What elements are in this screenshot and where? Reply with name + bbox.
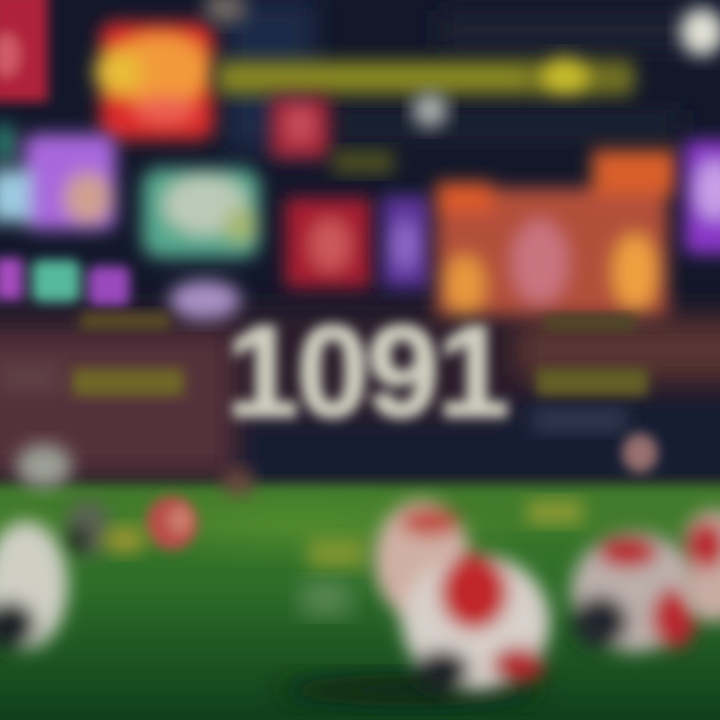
soccer ball: left small [66, 500, 110, 556]
screen: green and white [142, 168, 260, 258]
text: small yellow [332, 150, 394, 174]
soccer ball: right red and white [571, 532, 699, 652]
soccer ball: large left white [0, 521, 68, 649]
soccer ball: back red and white [374, 500, 470, 620]
distant ball: right [622, 433, 658, 473]
light: white top center [412, 92, 448, 128]
pitch [0, 480, 720, 720]
caption: right yellow [536, 368, 648, 396]
screen: violet [382, 196, 430, 288]
screen: orange and red [94, 22, 214, 140]
screen: top left red [0, 0, 48, 102]
background: night sky and upper stands [0, 0, 720, 340]
yellow flare: pitch center [308, 537, 366, 569]
caption: upper left yellow [80, 312, 170, 330]
caption: upper right yellow [545, 315, 635, 331]
number: 1091: 1091 [226, 298, 508, 444]
yellow flare: pitch left [103, 526, 147, 554]
distant ball: center left [222, 468, 254, 496]
screen: red [285, 198, 371, 288]
soccer ball: far left white [16, 444, 72, 488]
screen: small purple white [169, 280, 241, 320]
soccer ball: far right [684, 510, 720, 622]
screen: small red [270, 97, 330, 159]
soccer ball: front large red and white [402, 554, 550, 690]
screen: purple right [684, 140, 720, 254]
screens: small row [0, 258, 130, 306]
pale flare: pitch center [302, 582, 350, 614]
light: white top right [680, 8, 720, 56]
caption: left yellow [72, 368, 184, 396]
screen: orange wall [436, 150, 676, 316]
shadow: under large ball [280, 674, 540, 706]
light: faint top [203, 0, 247, 24]
background: maroon stands [0, 305, 720, 495]
headline band: yellow [215, 56, 635, 96]
screen: purple [0, 125, 116, 230]
soccer ball: left red [146, 496, 198, 550]
caption: right grey [532, 408, 627, 432]
caption: left grey [0, 362, 60, 392]
yellow flare: pitch right [527, 500, 583, 524]
